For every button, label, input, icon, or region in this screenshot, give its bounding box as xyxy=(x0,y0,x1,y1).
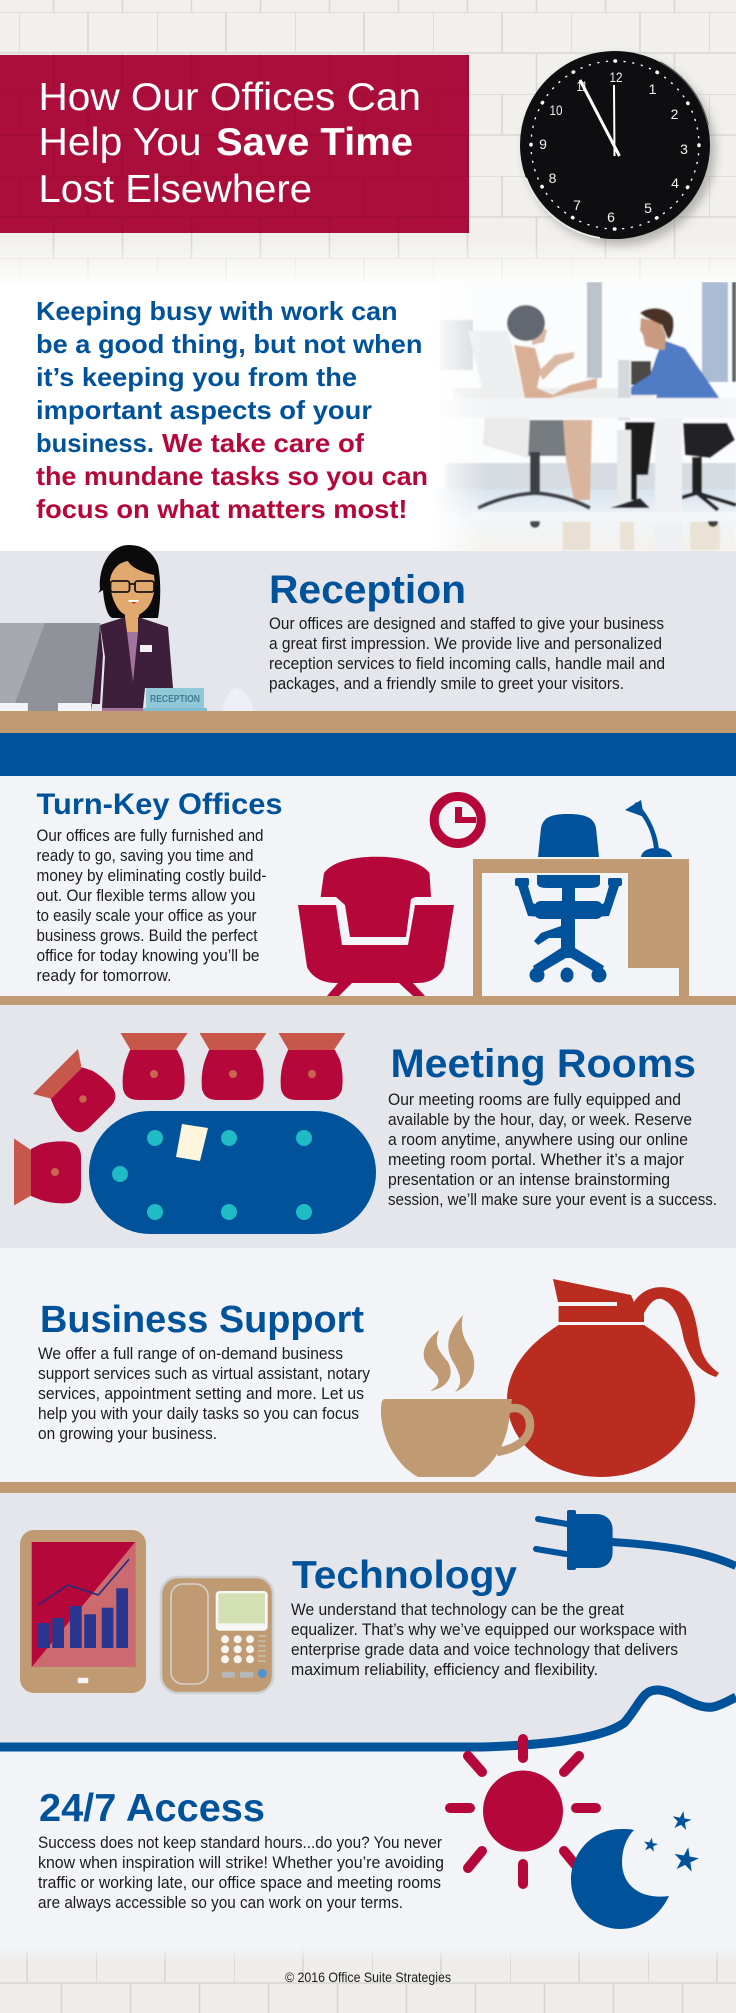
illustration: receptionist xyxy=(91,545,173,711)
icon: meeting chairs xyxy=(14,1033,346,1206)
body text: ready for tomorrow. xyxy=(36,966,172,985)
body text xyxy=(291,1600,687,1679)
body text: available by the hour, day, or week. Reserve xyxy=(388,1110,692,1129)
icon: coffee pot xyxy=(507,1279,719,1477)
icon: wall clock xyxy=(520,51,715,245)
body text: meeting room portal. Whether it’s a major xyxy=(388,1150,684,1169)
footer: brick wall xyxy=(0,1947,736,2013)
body text: know when inspiration will strike! Whether you’re avoiding xyxy=(38,1853,444,1872)
intro text: it’s keeping you from the xyxy=(36,362,357,392)
heading: Technology xyxy=(292,1554,517,1597)
icon: wall clock: 10 xyxy=(550,102,563,118)
body text: ready to go, saving you time and xyxy=(36,846,254,865)
icon: desk lamp xyxy=(625,800,672,857)
icon: armchair xyxy=(298,857,454,996)
icon: wall clock: 3 xyxy=(680,141,688,157)
icon: wall clock: 7 xyxy=(573,197,581,213)
intro text: Keeping busy with work can xyxy=(36,296,398,326)
panel: turn-key offices xyxy=(0,776,736,1005)
icon: wall clock: 8 xyxy=(549,170,557,186)
icon: desk phone xyxy=(161,1577,273,1693)
body text: reception services to field incoming calls, handle mail and xyxy=(269,654,665,673)
icon: wall clock: 6 xyxy=(607,209,615,225)
heading: Business Support xyxy=(40,1299,364,1341)
heading: Meeting Rooms xyxy=(390,1042,696,1086)
body text: maximum reliability, efficiency and flexibility. xyxy=(291,1660,598,1679)
white table xyxy=(440,398,736,418)
icon: wall clock: 4 xyxy=(671,175,679,191)
reception desk sign: RECEPTION xyxy=(150,694,200,705)
body text: Our offices are designed and staffed to give your business xyxy=(269,614,664,633)
icon: wall clock xyxy=(434,796,481,844)
body text xyxy=(38,1833,444,1912)
body text: on growing your business. xyxy=(38,1424,217,1443)
title banner xyxy=(0,55,469,233)
title xyxy=(38,76,421,211)
body text: Success does not keep standard hours...do you? You never xyxy=(38,1833,442,1852)
icon: power plug and cord xyxy=(0,1510,736,1747)
panel: business support xyxy=(0,1248,736,1493)
body text: a great first impression. We provide live and personalized xyxy=(269,634,662,653)
heading: 24/7 Access xyxy=(39,1787,265,1830)
body text: equalizer. That’s why we’ve equipped our workspace with xyxy=(291,1620,687,1639)
body text xyxy=(269,614,665,693)
icon: wall clock: 2 xyxy=(671,106,679,122)
title: Lost Elsewhere xyxy=(38,168,312,211)
body text xyxy=(388,1090,717,1209)
body text: out. Our flexible terms allow you xyxy=(36,886,256,905)
man xyxy=(610,308,736,527)
body text: to easily scale your office as your xyxy=(36,906,257,925)
body text: are always accessible so you can work on your terms. xyxy=(38,1893,403,1912)
icon: white bell xyxy=(223,688,253,711)
body text xyxy=(36,826,266,985)
icon: moon and stars xyxy=(571,1810,700,1929)
intro text: business. xyxy=(36,428,154,458)
panel: technology xyxy=(0,1493,736,1753)
icon: wall clock: 1 xyxy=(649,81,657,97)
intro text: focus on what matters most! xyxy=(36,494,408,524)
body text: services, appointment setting and more. Let us xyxy=(38,1384,364,1403)
icon: wall clock: 5 xyxy=(644,200,652,216)
intro text: important aspects of your xyxy=(36,395,372,425)
body text: We understand that technology can be the great xyxy=(291,1600,624,1619)
body text: support services such as virtual assistant, notary xyxy=(38,1364,370,1383)
body text: business grows. Build the perfect xyxy=(36,926,258,945)
icon: tablet with chart xyxy=(20,1530,146,1693)
intro text: be a good thing, but not when xyxy=(36,329,422,359)
reception desk sign xyxy=(143,688,207,711)
title: How Our Offices Can xyxy=(38,76,421,119)
panel: reception xyxy=(0,545,736,776)
body text: office for today knowing you’ll be xyxy=(36,946,260,965)
body text: a room anytime, anywhere using our online xyxy=(388,1130,688,1149)
photo: two colleagues at a desk xyxy=(430,282,736,551)
body text: money by eliminating costly build- xyxy=(36,866,266,885)
icon: conference table xyxy=(89,1111,376,1234)
intro text: We take care of xyxy=(162,428,364,458)
icon: office chair xyxy=(515,814,622,982)
copyright: © 2016 Office Suite Strategies xyxy=(285,1969,451,1985)
background: brick wall header xyxy=(0,0,736,282)
icon: wall clock: 12 xyxy=(610,69,623,85)
panel: 24/7 access xyxy=(0,1690,736,1947)
icon: computer monitor xyxy=(0,623,100,711)
white chair xyxy=(468,331,522,388)
body text: help you with your daily tasks so you can focus xyxy=(38,1404,359,1423)
intro text: the mundane tasks so you can xyxy=(36,461,428,491)
body text: presentation or an intense brainstorming xyxy=(388,1170,670,1189)
body text: traffic or working late, our office space and meeting rooms xyxy=(38,1873,441,1892)
icon: coffee cup xyxy=(381,1315,530,1477)
heading: Reception xyxy=(269,568,466,612)
body text: packages, and a friendly smile to greet your visitors. xyxy=(269,674,624,693)
body text: Our meeting rooms are fully equipped and xyxy=(388,1090,681,1109)
icon: sun xyxy=(450,1739,596,1884)
body text: We offer a full range of on-demand business xyxy=(38,1344,343,1363)
icon: wall clock: 11 xyxy=(576,78,588,94)
woman xyxy=(507,305,597,500)
title: Help You xyxy=(38,121,202,164)
heading: Turn-Key Offices xyxy=(36,788,282,821)
body text xyxy=(38,1344,370,1443)
icon: desk xyxy=(473,859,689,996)
icon: wall clock: 9 xyxy=(539,136,547,152)
panel: intro xyxy=(0,282,736,551)
body text: Our offices are fully furnished and xyxy=(36,826,264,845)
intro text xyxy=(36,296,428,524)
body text: enterprise grade data and voice technology that delivers xyxy=(291,1640,678,1659)
title: Save Time xyxy=(216,121,413,164)
panel: meeting rooms xyxy=(0,1005,736,1248)
